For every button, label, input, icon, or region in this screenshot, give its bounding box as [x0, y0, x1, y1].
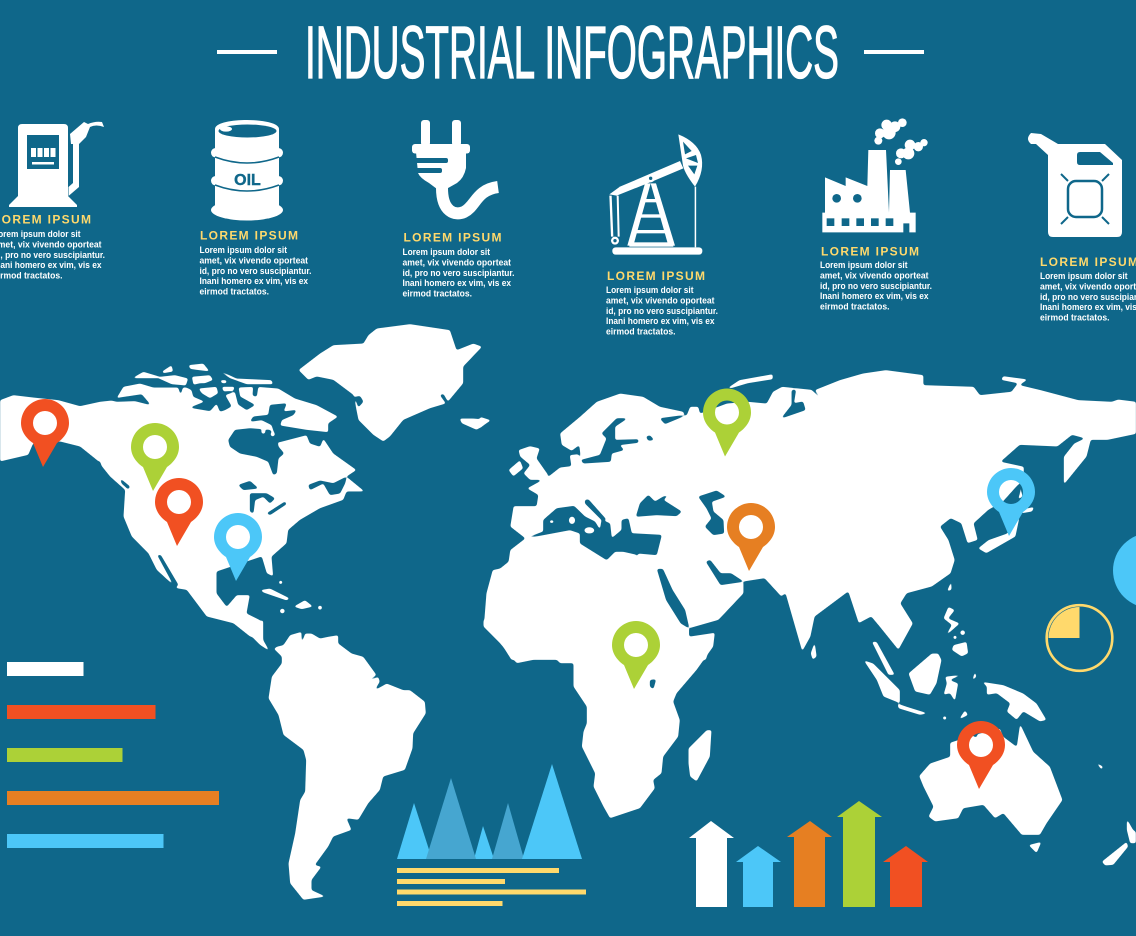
text block: electric plug: Inani homero ex vim, vis ex: [402, 277, 512, 288]
text block: oil barrel: id, pro no vero suscipiantur.: [200, 265, 312, 276]
text block: factory: Inani homero ex vim, vis ex: [820, 290, 929, 301]
text block: jerry can: [1040, 255, 1136, 322]
text block: oil pumpjack: eirmod tractatos.: [606, 326, 676, 336]
map pin: western USA, red: [155, 478, 203, 546]
text block: oil pumpjack: Inani homero ex vim, vis ex: [606, 315, 715, 326]
icon: electric plug: [412, 120, 498, 213]
text block: oil barrel: LOREM IPSUM: [200, 228, 298, 242]
text block: electric plug: [402, 230, 514, 298]
map: Southeast Asia and Oceania: [863, 580, 1136, 866]
text block: electric plug: Lorem ipsum dolor sit: [402, 246, 490, 257]
text block: oil barrel: eirmod tractatos.: [200, 286, 269, 296]
arrow bar chart: [689, 801, 928, 907]
map pin: Australia, red: [957, 721, 1005, 789]
map pin: Middle East, orange: [727, 503, 775, 571]
text block: factory: LOREM IPSUM: [821, 244, 919, 258]
map pin: Alaska, red: [21, 399, 69, 467]
text block: factory: amet, vix vivendo oporteat: [820, 270, 928, 280]
text block: oil barrel: Lorem ipsum dolor sit: [200, 244, 287, 255]
map pin: Russia, green: [703, 388, 751, 456]
text block: electric plug: id, pro no vero suscipiantur.: [402, 267, 514, 278]
icon: oil barrel: OIL: [234, 172, 261, 189]
icon: oil pumpjack: [609, 134, 702, 255]
map pin: Africa, green: [612, 621, 660, 689]
text block: factory: Lorem ipsum dolor sit: [820, 259, 908, 270]
text block: electric plug: amet, vix vivendo oporteat: [402, 256, 511, 268]
icon: factory with smoke: [822, 118, 928, 232]
text block: electric plug: eirmod tractatos.: [402, 288, 472, 298]
icon: oil barrel: [211, 120, 283, 220]
text block: factory: [820, 244, 932, 312]
map: North America and Greenland: [0, 324, 492, 640]
text block: oil pumpjack: Lorem ipsum dolor sit: [606, 284, 694, 295]
text block: oil barrel: Inani homero ex vim, vis ex: [200, 275, 309, 286]
text block: factory: eirmod tractatos.: [820, 300, 890, 312]
world map: [0, 300, 1136, 936]
text block: jerry can: LOREM IPSUM: [1040, 255, 1136, 269]
text block: oil pumpjack: LOREM IPSUM: [607, 269, 705, 283]
map: South America and southern Africa: [240, 620, 715, 900]
map: European seas and British Isles: [508, 418, 726, 563]
text block: factory: id, pro no vero suscipiantur.: [820, 280, 932, 291]
triangle chart: [397, 764, 582, 859]
map: Eurasia and northern Africa: [480, 370, 1136, 660]
text block: jerry can: eirmod tractatos.: [1040, 312, 1110, 322]
text block: oil barrel: [200, 228, 312, 296]
text block: oil pumpjack: [606, 269, 718, 336]
text block: oil pumpjack: id, pro no vero suscipiantur.: [606, 305, 718, 316]
text block: fuel pump: [0, 212, 105, 280]
text block: jerry can: Lorem ipsum dolor sit: [1040, 270, 1128, 281]
map pin: Canada, green: [131, 423, 179, 491]
pie chart: [1047, 605, 1112, 671]
icon: jerry can: [1028, 133, 1122, 237]
map pin: southern USA, blue: [214, 513, 262, 581]
map pin: Japan, blue: [987, 468, 1035, 536]
icon: fuel pump: [9, 122, 104, 207]
horizontal bar chart: [7, 662, 219, 848]
text block: electric plug: LOREM IPSUM: [404, 230, 502, 244]
yellow line bars: [397, 868, 586, 906]
text block: oil pumpjack: amet, vix vivendo oporteat: [606, 294, 714, 306]
text block: oil barrel: amet, vix vivendo oporteat: [200, 254, 308, 266]
map: Canadian Arctic and Hudson Bay: [110, 363, 343, 475]
blue circle, cropped at edge: [1113, 533, 1136, 608]
